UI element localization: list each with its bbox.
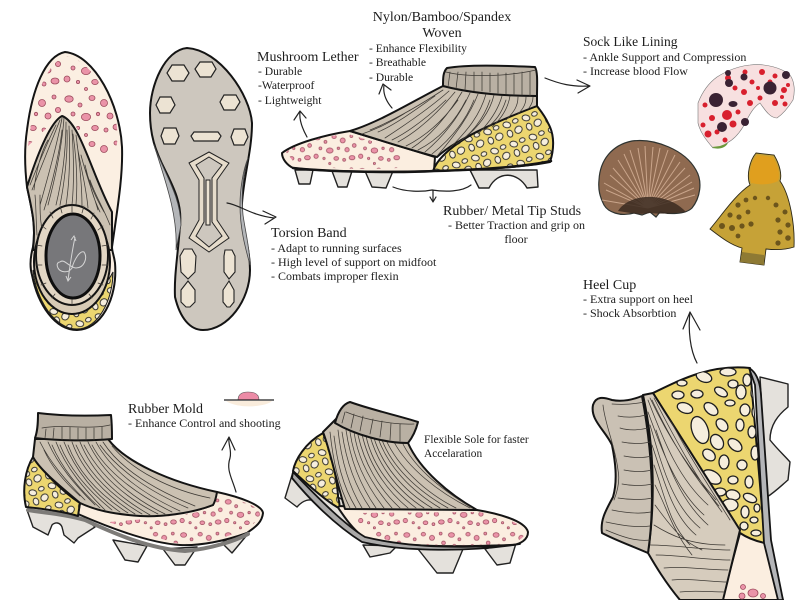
yellow heel cells <box>24 457 80 516</box>
arrow: rubber mold <box>222 437 236 492</box>
outer collar rim <box>34 210 110 314</box>
sock collar <box>35 413 112 440</box>
pink dots on toe <box>286 134 402 169</box>
label: Heel Cup <box>583 278 694 320</box>
toe section <box>282 131 435 172</box>
yellow heel cells <box>293 433 340 507</box>
top view of boot <box>25 52 122 330</box>
sole view of boot <box>150 48 252 330</box>
icon: rubber mold cross section <box>224 392 274 406</box>
woven upper <box>27 116 112 250</box>
pink dots on toe <box>355 512 525 545</box>
bottom-left boot <box>24 413 263 565</box>
arrow: sock lining <box>545 78 590 93</box>
woven upper <box>350 86 537 157</box>
bottom-middle boot <box>285 402 528 573</box>
yellow heel cells <box>433 106 553 171</box>
label: Mushroom Lether: - Lightweight <box>258 94 322 107</box>
label: Nylon/Bamboo/Spandex Woven: Nylon/Bamboo/Spandex <box>373 10 511 25</box>
arrow: heel cup <box>683 312 700 363</box>
label: Flexible Sole: Accelaration <box>424 448 482 460</box>
label: Heel Cup: - Shock Absorbtion <box>583 306 676 320</box>
collar ribs <box>446 70 536 96</box>
woven upper <box>33 439 217 516</box>
sole strip <box>293 161 551 172</box>
label: Rubber Mold: Rubber Mold <box>128 402 203 417</box>
bracket: studs <box>393 185 471 202</box>
arrow: mushroom leather <box>294 111 307 137</box>
label: Sock Like Lining: Sock Like Lining <box>583 34 678 49</box>
label: Nylon/Bamboo/Spandex Woven: - Durable <box>369 71 413 84</box>
label: Nylon/Bamboo/Spandex Woven: - Enhance Flexibility <box>369 42 467 55</box>
studs <box>285 472 517 573</box>
label: Rubber Mold <box>128 402 281 430</box>
hexagonal studs <box>156 62 248 145</box>
collar ribs <box>42 425 110 440</box>
weave stripes <box>40 442 210 515</box>
toe section <box>78 492 263 545</box>
woven upper <box>323 418 477 510</box>
arrow: woven upper <box>379 84 392 108</box>
heel stud <box>760 377 790 497</box>
collar ribs <box>603 402 652 540</box>
label: Sock Like Lining: - Ankle Support and Compression <box>583 50 746 64</box>
woven upper section <box>643 393 740 600</box>
toe section <box>337 506 528 546</box>
yellow heel cells <box>33 270 113 329</box>
label: Sock Like Lining <box>583 34 746 78</box>
collar rim <box>36 205 108 305</box>
side view boot with callouts <box>282 66 553 188</box>
rear studs <box>180 249 235 307</box>
label: Rubber/ Metal Tip Studs <box>443 204 585 246</box>
heel grey sole strip <box>749 368 783 600</box>
label: Mushroom Lether: - Durable <box>258 65 302 78</box>
collar opening with logo <box>46 214 100 298</box>
grey arch strips <box>154 145 250 265</box>
sock collar section <box>593 396 652 553</box>
label: Torsion Band: - Combats improper flexin <box>271 269 399 283</box>
label: Heel Cup: - Extra support on heel <box>583 292 694 306</box>
toe and outer upper <box>25 52 122 330</box>
mushroom photo: oyster gills <box>599 141 700 217</box>
label: Flexible Sole: Flexible Sole for faster <box>424 434 529 446</box>
label: Torsion Band: - Adapt to running surfaces <box>271 241 402 255</box>
grey sole strip <box>28 510 248 551</box>
weave stripes <box>330 430 472 508</box>
pink dots on toe <box>108 496 260 544</box>
label: Torsion Band: Torsion Band <box>271 226 347 241</box>
label: Rubber/ Metal Tip Studs: floor <box>504 232 528 246</box>
label: Mushroom Lether: -Waterproof <box>258 79 314 92</box>
torsion band <box>189 152 229 252</box>
studs <box>27 510 247 565</box>
collar ribs <box>342 412 414 441</box>
collar ribs <box>36 205 108 305</box>
label: Nylon/Bamboo/Spandex Woven: - Breathable <box>369 56 426 69</box>
label: Torsion Band: - High level of support on midfoot <box>271 255 437 269</box>
label: Mushroom Lether <box>257 50 359 107</box>
weave stripes <box>30 118 110 235</box>
label: Rubber/ Metal Tip Studs: Rubber/ Metal Tip Studs <box>443 204 581 219</box>
sole strip <box>292 472 520 550</box>
label: Sock Like Lining: - Increase blood Flow <box>583 64 688 78</box>
label: Flexible Sole <box>424 434 529 460</box>
mushroom photo: bleeding tooth <box>698 65 794 149</box>
label: Heel Cup: Heel Cup <box>583 278 636 293</box>
label: Nylon/Bamboo/Spandex Woven <box>369 10 511 84</box>
pink rubber dots <box>739 584 766 599</box>
sock collar <box>335 402 418 443</box>
midfoot toe area <box>722 533 783 600</box>
heel stud cluster <box>295 170 538 188</box>
heel cup cells <box>672 368 761 536</box>
woven stripes <box>648 398 735 592</box>
label: Nylon/Bamboo/Spandex Woven: Woven <box>422 26 462 41</box>
label: Torsion Band <box>271 226 437 283</box>
label: Mushroom Lether: Mushroom Lether <box>257 50 359 65</box>
sock collar <box>443 66 537 96</box>
arrow: torsion band <box>227 203 276 224</box>
heel cup close-up <box>593 367 790 600</box>
label: Rubber Mold: - Enhance Control and shooting <box>128 416 281 430</box>
heel cup yellow cell panel <box>653 367 765 543</box>
label: Rubber/ Metal Tip Studs: - Better Traction and grip on <box>448 218 585 232</box>
sole plate <box>150 48 252 330</box>
pink rubber dots on toe <box>28 56 117 158</box>
weave stripes <box>362 90 533 155</box>
mushroom photo: veiled lattice <box>710 153 794 265</box>
